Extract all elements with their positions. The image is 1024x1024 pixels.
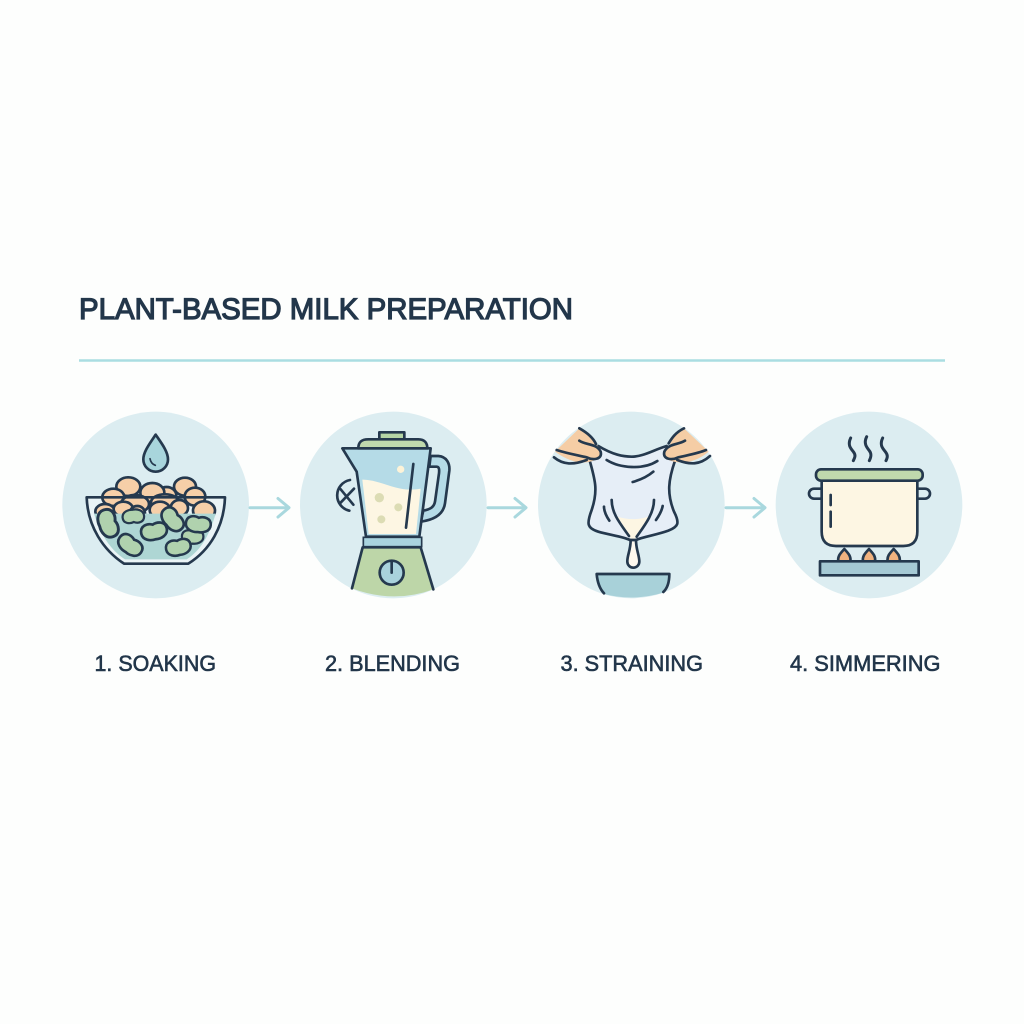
bowl (597, 574, 669, 598)
flames (838, 549, 900, 561)
burner (820, 561, 919, 575)
handle (421, 456, 449, 522)
label 1: 1. SOAKING (94, 651, 216, 676)
jar (342, 448, 431, 537)
cloth (588, 446, 677, 543)
pot handles (809, 489, 930, 499)
milk (362, 480, 421, 534)
peach beans (95, 477, 215, 521)
step 2 icon: blender (300, 412, 487, 598)
arrow 1 (250, 498, 289, 517)
green beans (95, 504, 211, 559)
icon: water drop (143, 435, 168, 472)
lid (358, 432, 427, 448)
left hand (554, 428, 601, 463)
label 4: 4. SIMMERING (790, 651, 940, 676)
step 3 icon: straining cloth (538, 412, 725, 598)
blender collar (363, 537, 422, 547)
glass bowl outline (87, 497, 225, 564)
title: PLANT-BASED MILK PREPARATION (79, 293, 573, 326)
step 4 icon: simmering pot (776, 412, 962, 598)
label 2: 2. BLENDING (325, 651, 460, 676)
blender base (352, 547, 433, 596)
arrow 2 (488, 498, 526, 517)
step 1 icon: soaking bowl (62, 412, 249, 598)
water (94, 514, 216, 559)
label 3: 3. STRAINING (560, 651, 703, 676)
icon: blade spin (337, 480, 354, 511)
arrow 3 (726, 498, 765, 517)
pot body (822, 481, 917, 546)
milk drip (627, 540, 639, 568)
right hand (664, 428, 710, 463)
icon: steam (849, 437, 887, 461)
pot lid (816, 469, 923, 481)
